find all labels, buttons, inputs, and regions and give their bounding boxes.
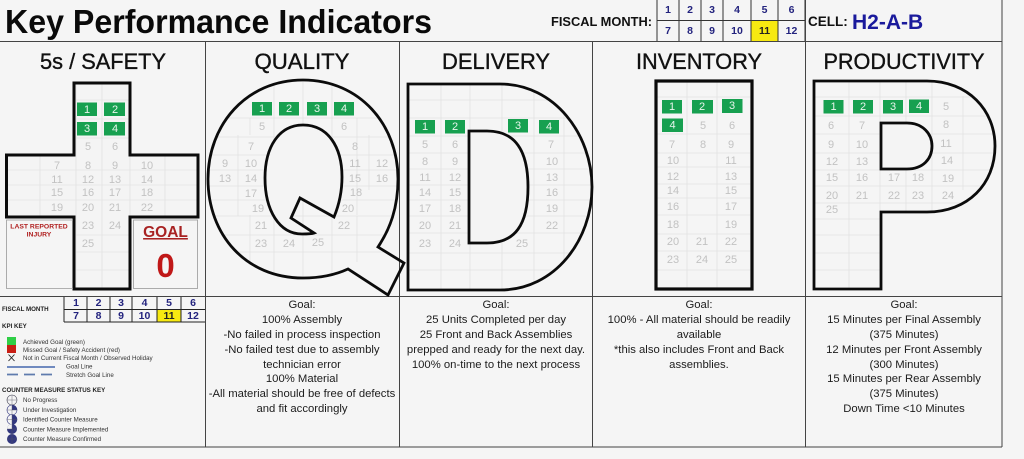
safety cross grid [8, 84, 196, 288]
productivity day numbers: 20 [826, 190, 838, 202]
inventory day numbers: 7 [669, 139, 675, 151]
goal text: delivery: 25 Units Completed per day [426, 314, 566, 326]
productivity day numbers: 25 [826, 204, 838, 216]
goal text: inventory [608, 299, 791, 371]
fiscal month header table: 7 [665, 25, 671, 37]
safety day numbers [51, 102, 153, 250]
legend fiscal month table: 9 [118, 310, 124, 322]
fiscal month header table: 12 [786, 25, 797, 37]
safety day numbers: 2 [112, 104, 118, 116]
legend fiscal month table: 6 [190, 297, 196, 309]
safety day numbers: 3 [84, 123, 90, 135]
inventory day numbers: 14 [667, 185, 679, 197]
delivery day numbers: 25 [516, 238, 528, 250]
last reported injury box: INJURY [27, 232, 52, 238]
goal text: delivery: Goal: [482, 299, 510, 311]
delivery day numbers: 18 [449, 203, 461, 215]
productivity day numbers: 11 [940, 138, 952, 150]
delivery day numbers: 21 [449, 220, 461, 232]
safety day numbers: 5 [85, 141, 91, 153]
delivery day numbers: 14 [419, 187, 431, 199]
KPI key: Stretch Goal Line [66, 372, 114, 379]
quality day numbers [219, 102, 388, 250]
productivity day numbers: 10 [856, 139, 868, 151]
productivity day numbers: 24 [942, 190, 954, 202]
inventory day numbers: 13 [725, 171, 737, 183]
goal text: productivity: Down Time <10 Minutes [843, 403, 965, 415]
productivity day numbers: 14 [941, 155, 953, 167]
quality day numbers: 4 [341, 103, 347, 115]
inventory day numbers: 4 [669, 120, 676, 132]
legend fiscal month table: 7 [73, 310, 79, 322]
delivery day numbers: 11 [419, 172, 431, 184]
KPI key: Goal Line [66, 364, 93, 370]
inventory day numbers: 6 [729, 120, 735, 132]
inventory day numbers: 2 [699, 101, 705, 113]
panel: quality [205, 49, 404, 295]
inventory day numbers: 3 [729, 100, 735, 112]
delivery day numbers: 4 [546, 121, 552, 133]
goal text: delivery: prepped and ready for the next day. [407, 344, 585, 356]
goal text: quality: and fit accordingly [256, 403, 348, 415]
productivity day numbers: 9 [828, 139, 834, 151]
productivity day numbers: 13 [856, 156, 868, 168]
safety day numbers: 25 [82, 238, 94, 250]
inventory day numbers: 8 [700, 139, 706, 151]
inventory day numbers: 12 [667, 171, 679, 183]
productivity day numbers: 16 [856, 172, 868, 184]
goal text: productivity: (375 Minutes) [869, 329, 939, 341]
delivery day numbers: 15 [449, 187, 461, 199]
quality day numbers: 2 [286, 103, 292, 115]
legend panel [2, 297, 205, 444]
legend fiscal month table: 4 [142, 297, 148, 309]
safety day numbers: 19 [51, 202, 63, 214]
quality day numbers: 18 [350, 187, 362, 199]
quality day numbers: 21 [255, 220, 267, 232]
productivity day numbers: 22 [888, 190, 900, 202]
delivery day numbers: 20 [419, 220, 431, 232]
fiscal month header table: 4 [734, 4, 740, 16]
quality day numbers: 7 [248, 141, 254, 153]
productivity day numbers: 4 [916, 100, 922, 112]
panel: delivery [408, 49, 592, 290]
productivity day numbers: 3 [890, 101, 896, 113]
quality day numbers: 19 [252, 203, 264, 215]
delivery day numbers: 19 [546, 203, 558, 215]
goal text: delivery: 25 Front and Back Assemblies [420, 329, 573, 341]
goal text: quality: technician error [263, 359, 341, 371]
D outline [408, 84, 592, 290]
goal text: inventory: Goal: [685, 299, 713, 311]
inventory day numbers: 21 [696, 236, 708, 248]
counter measure status key: Identified Counter Measure [23, 416, 98, 424]
delivery day numbers: 24 [449, 238, 461, 250]
quality day numbers: 12 [376, 158, 388, 170]
legend fiscal month table: FISCAL MONTH [2, 306, 49, 313]
legend fiscal month table: 2 [96, 297, 102, 309]
goal text: quality: -No failed in process inspection [224, 329, 380, 341]
delivery day numbers: 2 [452, 121, 458, 133]
delivery day numbers: 12 [449, 172, 461, 184]
inventory day numbers: 20 [667, 236, 679, 248]
legend fiscal month table: 10 [139, 310, 150, 322]
goal text: productivity: 15 Minutes per Rear Assembly [827, 373, 981, 385]
safety day numbers: 7 [54, 160, 60, 172]
delivery day numbers: 3 [515, 120, 521, 132]
delivery day numbers [415, 119, 559, 250]
inventory day numbers [662, 99, 742, 266]
delivery day numbers: 22 [546, 220, 558, 232]
fiscal month header table: 2 [687, 4, 693, 16]
safety day numbers: 1 [84, 104, 90, 116]
fiscal month header table: 6 [789, 4, 795, 16]
inventory day numbers: 22 [725, 236, 737, 248]
cell label: H2-A-B [852, 11, 923, 34]
legend fiscal month table: 1 [73, 297, 79, 309]
inventory day numbers: 11 [725, 155, 737, 167]
counter measure status key: Counter Measure Implemented [23, 426, 109, 434]
goal box [134, 220, 198, 288]
safety day numbers: 21 [109, 202, 121, 214]
safety day numbers: 23 [82, 220, 94, 232]
safety day numbers: 18 [141, 187, 153, 199]
inventory day numbers: 24 [696, 254, 708, 266]
goal text: quality: -All material should be free of defects [209, 388, 396, 400]
productivity day numbers [824, 100, 954, 216]
I grid [656, 81, 752, 289]
goal text: delivery: 100% on-time to the next process [412, 359, 580, 371]
panel: 5s / safety [0, 49, 205, 292]
Q counter [265, 125, 342, 234]
quality day numbers: 17 [245, 188, 257, 200]
productivity day numbers: 2 [860, 101, 866, 113]
safety day numbers: 8 [85, 160, 91, 172]
delivery day numbers: 17 [419, 203, 431, 215]
quality day numbers: 8 [352, 141, 358, 153]
quality day numbers: 3 [314, 103, 320, 115]
counter measure status key: COUNTER MEASURE STATUS KEY [2, 387, 106, 394]
heading: inventory: INVENTORY [636, 49, 762, 74]
safety day numbers: 12 [82, 174, 94, 186]
Q grid [205, 80, 400, 280]
inventory day numbers: 15 [725, 185, 737, 197]
safety day numbers: 9 [112, 160, 118, 172]
delivery day numbers: 13 [546, 172, 558, 184]
heading: delivery: DELIVERY [442, 49, 550, 74]
inventory day numbers: 10 [667, 155, 679, 167]
quality day numbers: 16 [376, 173, 388, 185]
inventory day numbers: 9 [728, 139, 734, 151]
KPI key: Missed Goal / Safety Accident (red) [23, 347, 120, 354]
goal text: quality: -No failed test due to assembly [224, 344, 380, 356]
I outline [656, 81, 752, 289]
P counter [881, 123, 932, 169]
quality day numbers: 20 [342, 203, 354, 215]
quality day numbers: 22 [338, 220, 350, 232]
productivity day numbers: 12 [826, 156, 838, 168]
productivity day numbers: 18 [912, 172, 924, 184]
productivity day numbers: 19 [942, 173, 954, 185]
delivery day numbers: 23 [419, 238, 431, 250]
legend fiscal month table: 8 [96, 310, 102, 322]
fiscal month header table: 11 [759, 25, 770, 37]
productivity day numbers: 8 [943, 119, 949, 131]
legend fiscal month table: 3 [118, 297, 124, 309]
goal text: productivity: 12 Minutes per Front Assembly [826, 344, 982, 356]
KPI key: Achieved Goal (green) [23, 339, 85, 346]
goal text: productivity: 15 Minutes per Final Assembly [827, 314, 981, 326]
delivery day numbers: 7 [548, 139, 554, 151]
panel: productivity [814, 49, 995, 289]
delivery day numbers: 5 [422, 139, 428, 151]
KPI key: KPI KEY [2, 323, 28, 330]
safety day numbers: 22 [141, 202, 153, 214]
last reported injury box [6, 220, 73, 288]
quality day numbers: 6 [341, 121, 347, 133]
delivery day numbers: 16 [546, 187, 558, 199]
inventory day numbers: 23 [667, 254, 679, 266]
quality day numbers: 1 [259, 103, 265, 115]
goal text: quality: 100% Assembly [262, 314, 343, 326]
D counter [469, 131, 528, 243]
fiscal month header table: 9 [709, 25, 715, 37]
inventory day numbers: 18 [667, 219, 679, 231]
inventory day numbers: 5 [700, 120, 706, 132]
goal text: quality: 100% Material [266, 373, 338, 385]
goal text: inventory: 100% - All material should be readily [608, 314, 791, 326]
fiscal month header table [551, 0, 805, 41]
productivity day numbers: 7 [859, 120, 865, 132]
title: Key Performance Indicators [5, 3, 432, 40]
goal text: productivity: (300 Minutes) [869, 359, 939, 371]
quality day numbers: 24 [283, 238, 295, 250]
safety day numbers: 24 [109, 220, 121, 232]
safety day numbers: 16 [82, 187, 94, 199]
safety day numbers: 15 [51, 187, 63, 199]
safety day numbers: 6 [112, 141, 118, 153]
goal text: inventory: assemblies. [669, 359, 729, 371]
delivery day numbers: 1 [422, 121, 428, 133]
goal box: GOAL [143, 224, 188, 241]
safety day numbers: 13 [109, 174, 121, 186]
heading: productivity: PRODUCTIVITY [824, 49, 985, 74]
counter measure status key: No Progress [23, 397, 57, 404]
cell label [808, 11, 923, 34]
P grid [814, 81, 995, 289]
legend fiscal month table: 5 [166, 297, 172, 309]
goal text: productivity [826, 299, 982, 415]
quality day numbers: 5 [259, 121, 265, 133]
fiscal month header table: 1 [665, 4, 671, 16]
safety day numbers: 14 [141, 174, 153, 186]
fiscal month header table: 8 [687, 25, 693, 37]
delivery day numbers: 8 [422, 156, 428, 168]
legend fiscal month table: 11 [163, 310, 175, 322]
inventory day numbers: 19 [725, 219, 737, 231]
safety day numbers: 4 [112, 123, 118, 135]
goal text: quality: Goal: [288, 299, 316, 311]
cell label: CELL: [808, 14, 848, 29]
safety day numbers: 10 [141, 160, 153, 172]
delivery day numbers: 9 [452, 156, 458, 168]
inventory day numbers: 17 [725, 201, 737, 213]
quality day numbers: 25 [312, 237, 324, 249]
quality day numbers: 9 [222, 158, 228, 170]
heading: quality: QUALITY [254, 49, 350, 74]
KPI key: Not in Current Fiscal Month / Observed Holiday [23, 355, 154, 362]
productivity day numbers: 21 [856, 190, 868, 202]
panel: inventory [636, 49, 762, 289]
quality day numbers: 13 [219, 173, 231, 185]
goal text: inventory: *this also includes Front and Back [614, 344, 784, 356]
legend fiscal month table: 12 [187, 310, 199, 322]
quality day numbers: 11 [349, 158, 361, 170]
goal box: 0 [156, 247, 175, 284]
fiscal month header table: 3 [709, 4, 715, 16]
inventory day numbers: 1 [669, 101, 675, 113]
productivity day numbers: 15 [826, 172, 838, 184]
counter measure status key: Counter Measure Confirmed [23, 436, 102, 443]
productivity day numbers: 1 [830, 101, 837, 113]
quality day numbers: 23 [255, 238, 267, 250]
last reported injury box: LAST REPORTED [10, 224, 68, 230]
safety day numbers: 20 [82, 202, 94, 214]
safety day numbers: 17 [109, 187, 121, 199]
delivery day numbers: 6 [452, 139, 458, 151]
goal text: inventory: available [677, 329, 721, 341]
productivity day numbers: 6 [828, 120, 834, 132]
counter measure status key [2, 387, 109, 444]
safety cross outline [6, 83, 198, 289]
inventory day numbers: 16 [667, 201, 679, 213]
quality day numbers: 15 [349, 173, 361, 185]
inventory day numbers: 25 [725, 254, 737, 266]
KPI key [2, 323, 154, 379]
counter measure status key: Under Investigation [23, 407, 77, 414]
D grid [408, 84, 592, 290]
goal text: productivity: Goal: [890, 299, 918, 311]
fiscal month header table: FISCAL MONTH: [551, 14, 652, 29]
Q outline [208, 80, 404, 295]
P outline [814, 81, 995, 289]
goal text: delivery [407, 299, 585, 371]
productivity day numbers: 5 [943, 101, 949, 113]
legend fiscal month table [2, 297, 205, 322]
fiscal month header table: 10 [731, 25, 743, 37]
delivery day numbers: 10 [546, 156, 558, 168]
fiscal month header table: 5 [762, 4, 768, 16]
goal text: quality [209, 299, 396, 415]
heading: safety: 5s / SAFETY [40, 49, 166, 74]
quality day numbers: 14 [245, 173, 257, 185]
goal text: productivity: (375 Minutes) [869, 388, 939, 400]
quality day numbers: 10 [245, 158, 257, 170]
safety day numbers: 11 [51, 174, 63, 186]
productivity day numbers: 17 [888, 172, 900, 184]
productivity day numbers: 23 [912, 190, 924, 202]
